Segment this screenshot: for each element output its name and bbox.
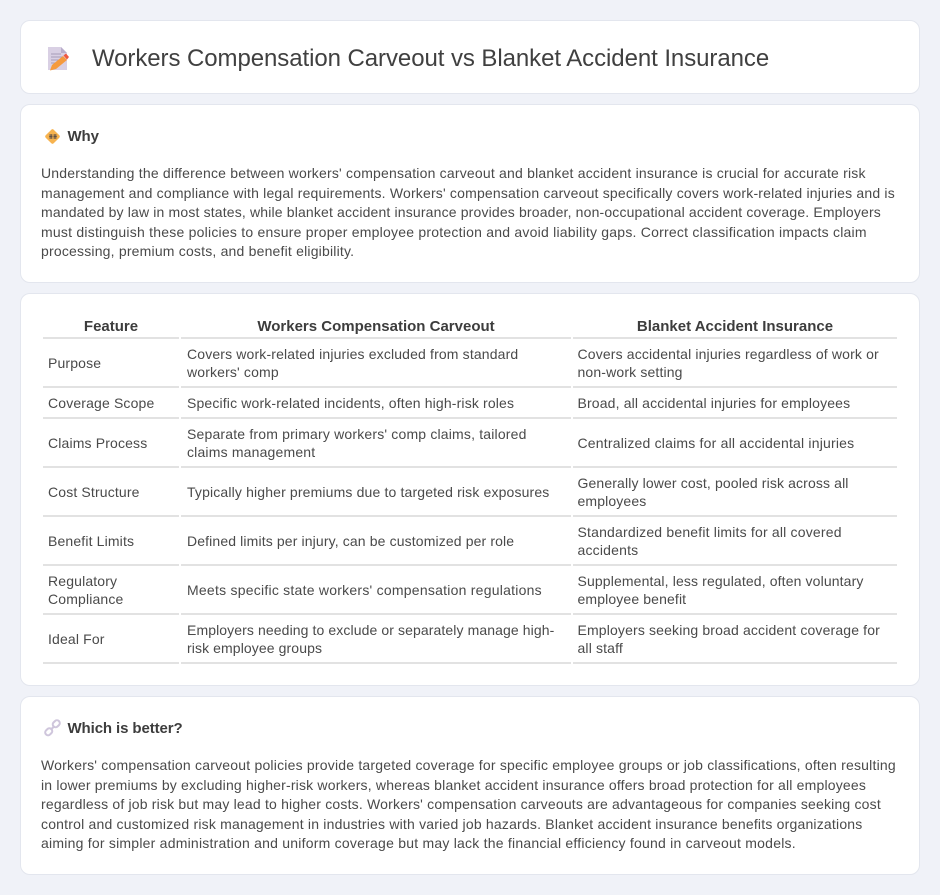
row: regulatory compliance xyxy=(48,573,864,607)
row: purpose: non-work setting xyxy=(578,364,683,380)
heading: which is better: Which is better? xyxy=(68,720,183,736)
row: regulatory compliance: employee benefit xyxy=(578,591,686,607)
row: ideal for: risk employee groups xyxy=(187,640,322,656)
text block: which is better xyxy=(41,757,896,851)
row: coverage scope xyxy=(48,395,850,411)
column heading: blanket: Blanket Accident Insurance xyxy=(637,318,833,335)
row: coverage scope: Specific work-related incidents, often high-risk roles xyxy=(187,395,514,411)
row: coverage scope: Broad, all accidental injuries for employees xyxy=(578,395,850,411)
row: regulatory compliance: Regulatory xyxy=(48,573,117,589)
row: benefit limits xyxy=(48,524,842,558)
column heading: feature: Feature xyxy=(84,318,138,335)
text block: why xyxy=(41,165,895,259)
icon: document with pencil xyxy=(48,47,69,70)
row: ideal for: all staff xyxy=(578,640,623,656)
row: claims process xyxy=(48,426,854,460)
panel: comparison table xyxy=(20,293,920,686)
row: claims process: claims management xyxy=(187,444,315,460)
heading: why: Why xyxy=(68,128,99,144)
text block: which is better: in lower premiums by excluding higher-risk workers, whereas blanket accident insurance offers broad protection for all employees xyxy=(41,776,866,792)
row: cost structure: Typically higher premiums due to targeted risk exposures xyxy=(187,484,549,500)
row: claims process: Centralized claims for all accidental injuries xyxy=(578,435,854,451)
text block: which is better: Workers' compensation carveout policies provide targeted coverage for specific employee groups or job classifications, often resulting xyxy=(41,757,896,773)
row: benefit limits: Defined limits per injury, can be customized per role xyxy=(187,533,514,549)
table header row xyxy=(84,318,833,335)
row: cost structure: employees xyxy=(578,493,646,509)
text block: which is better: aiming for simpler administration and uniform coverage but may lack the financial efficiency found in carveout models. xyxy=(41,835,796,851)
icon: chain link xyxy=(44,719,61,736)
row: regulatory compliance: Supplemental, less regulated, often voluntary xyxy=(578,573,864,589)
column heading: carveout: Workers Compensation Carveout xyxy=(257,318,495,335)
row: benefit limits: Standardized benefit limits for all covered xyxy=(578,524,842,540)
row: purpose: Covers work-related injuries excluded from standard xyxy=(187,346,518,362)
row: claims process: Claims Process xyxy=(48,435,147,451)
text block: why: must distinguish these policies to ensure proper employee protection and avoid liability gaps. Correct classification impacts claim xyxy=(41,224,867,240)
text block: why: processing, premium costs, and benefit eligibility. xyxy=(41,243,354,259)
row: regulatory compliance: Compliance xyxy=(48,591,123,607)
row: benefit limits: Benefit Limits xyxy=(48,533,134,549)
row: regulatory compliance: Meets specific state workers' compensation regulations xyxy=(187,582,542,598)
row: claims process: Separate from primary workers' comp claims, tailored xyxy=(187,426,527,442)
text block: why: Understanding the difference between workers' compensation carveout and blanket accident insurance is crucial for accurate risk xyxy=(41,165,866,181)
row: purpose: Covers accidental injuries regardless of work or xyxy=(578,346,879,362)
panel: header xyxy=(20,20,920,94)
text block: why: mandated by law in most states, while blanket accident insurance provides broader, non-occupational accident coverage. Employers xyxy=(41,204,881,220)
row: ideal for: Ideal For xyxy=(48,631,105,647)
row: purpose: Purpose xyxy=(48,355,101,371)
row: coverage scope: Coverage Scope xyxy=(48,395,154,411)
title: Workers Compensation Carveout vs Blanket Accident Insurance xyxy=(92,45,769,72)
panel: which is better xyxy=(20,696,920,875)
row: ideal for xyxy=(48,622,880,656)
text block: why: management and compliance with legal requirements. Workers' compensation carveout specifically covers work-related injuries and is xyxy=(41,184,895,200)
text block: which is better: control and customized risk management in industries with varied job hazards. Blanket accident insurance benefits organizations xyxy=(41,816,862,832)
row: benefit limits: accidents xyxy=(578,542,638,558)
row: cost structure: Generally lower cost, pooled risk across all xyxy=(578,475,849,491)
row: purpose xyxy=(48,346,879,380)
panel: why xyxy=(20,104,920,283)
row: ideal for: Employers needing to exclude or separately manage high- xyxy=(187,622,554,638)
row: ideal for: Employers seeking broad accident coverage for xyxy=(578,622,880,638)
row: purpose: workers' comp xyxy=(187,364,279,380)
icon: warning diamond xyxy=(45,129,60,144)
row: cost structure: Cost Structure xyxy=(48,484,140,500)
text block: which is better: regardless of job risk but may lead to higher costs. Workers' compensation carveouts are advantageous for companies seeking cost xyxy=(41,796,881,812)
row: cost structure xyxy=(48,475,849,509)
